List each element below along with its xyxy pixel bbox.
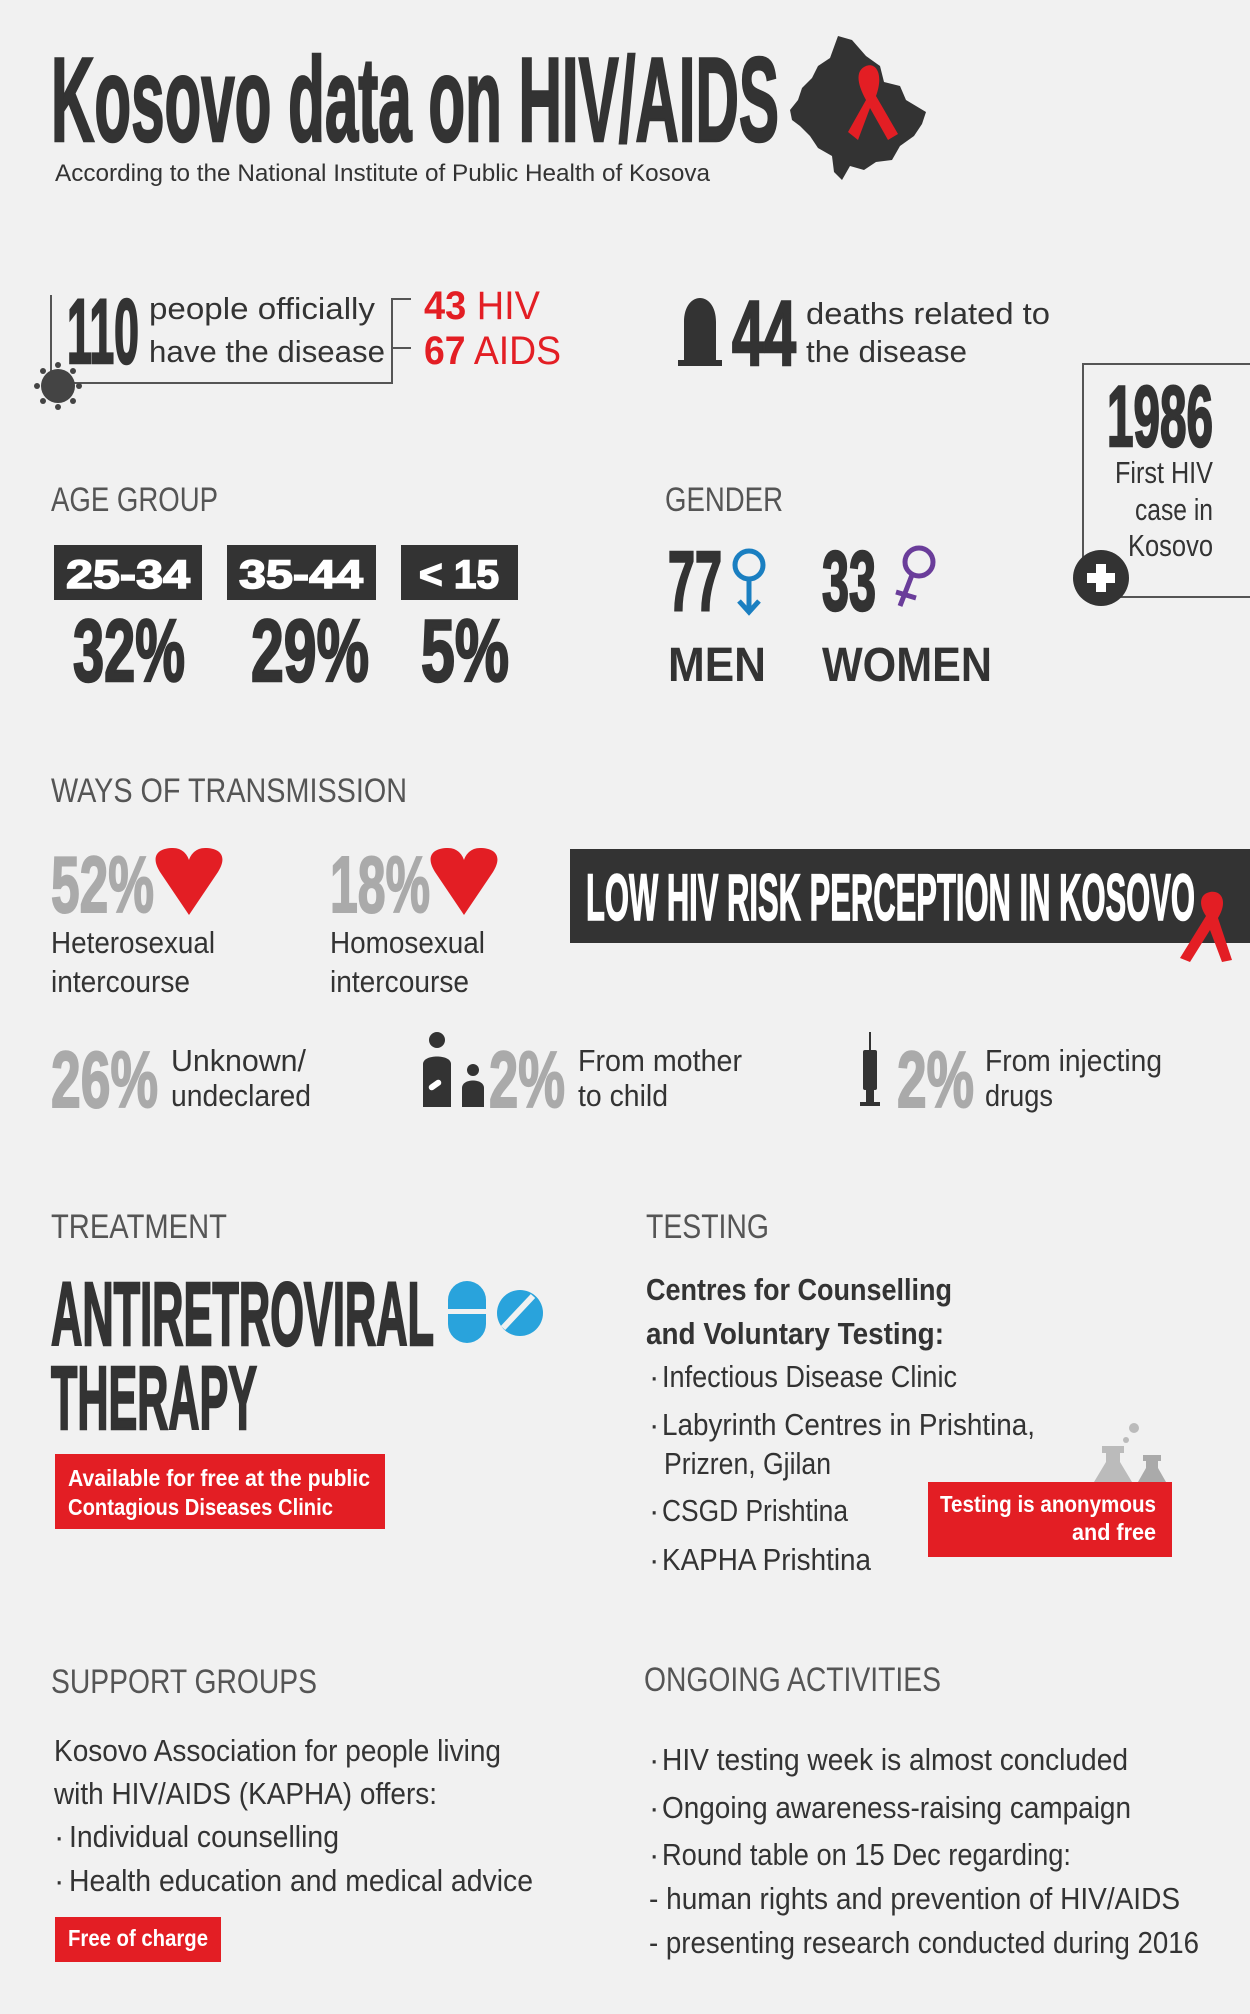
panel: gender: 33 (822, 534, 876, 628)
panel: age groups: 5% (421, 601, 509, 700)
panel: testing: Infectious Disease Clinic (662, 1359, 957, 1394)
callout: 1986 first case: case in (1135, 492, 1213, 527)
panel: ongoing activities: - presenting research conducted during 2016 (649, 1925, 1199, 1960)
callout: 1986 first case: First HIV (1115, 455, 1213, 490)
stat: homosexual: Homosexual (330, 925, 485, 960)
icon: pills (446, 1281, 543, 1343)
heading: ways of transmission: WAYS OF TRANSMISSION (51, 772, 407, 810)
stat: unknown: 26% (51, 1035, 158, 1124)
heading: gender: GENDER (665, 481, 783, 519)
stat: injecting drugs: From injecting (985, 1043, 1162, 1078)
panel: testing: CSGD Prishtina (662, 1493, 849, 1528)
stat: 44 deaths (678, 283, 1050, 385)
stat: unknown: undeclared (171, 1078, 311, 1113)
panel: testing (646, 1272, 1172, 1577)
icon: male (735, 551, 763, 612)
icon: flasks (1094, 1423, 1166, 1482)
panel: ongoing activities: Ongoing awareness-raising campaign (662, 1790, 1131, 1825)
stat: 110 people: people officially (149, 291, 376, 326)
panel: ongoing activities: HIV testing week is almost concluded (662, 1742, 1128, 1777)
panel: support groups: Health education and medical advice (69, 1863, 533, 1898)
icon: plus circle (1073, 550, 1129, 606)
panel: gender: WOMEN (822, 639, 992, 692)
panel: testing: · (649, 1493, 659, 1528)
panel: gender (668, 534, 992, 692)
stat: 44 deaths: the disease (806, 334, 967, 369)
stat: 110 people: 43 HIV (424, 284, 540, 328)
callout: free of charge (55, 1917, 221, 1962)
stat: homosexual: 18% (330, 840, 430, 929)
stat: injecting drugs: 2% (897, 1035, 974, 1124)
callout: 1986 first case: Kosovo (1128, 528, 1213, 563)
stat: mother to child: to child (578, 1078, 668, 1113)
panel: age groups (54, 545, 518, 700)
panel: support groups: · (54, 1819, 64, 1854)
heading: age group: AGE GROUP (51, 481, 218, 519)
stat: unknown: Unknown/ (171, 1043, 306, 1078)
panel: support groups: Individual counselling (69, 1819, 339, 1854)
panel: ongoing activities: · (649, 1790, 659, 1825)
panel: testing: and Voluntary Testing: (646, 1316, 944, 1351)
stat: 44 deaths: 44 (732, 283, 796, 385)
stat: homosexual (330, 840, 497, 999)
panel: age groups: 29% (251, 601, 369, 700)
panel: ongoing activities: Round table on 15 Dec regarding: (662, 1837, 1071, 1872)
icon: mother and child (423, 1032, 484, 1107)
callout: 1986 first case (1073, 364, 1250, 606)
icon: syringe (860, 1032, 880, 1106)
icon: ribbon (1180, 892, 1232, 962)
panel: ongoing activities: · (649, 1837, 659, 1872)
stat: mother to child: From mother (578, 1043, 742, 1078)
panel: ongoing activities: - human rights and prevention of HIV/AIDS (649, 1881, 1180, 1916)
callout: free treatment (55, 1454, 385, 1529)
callout: anonymous testing: Testing is anonymous (940, 1491, 1156, 1517)
callout: anonymous testing (928, 1482, 1172, 1557)
panel: treatment: THERAPY (51, 1349, 257, 1449)
stat: injecting drugs (860, 1032, 1162, 1124)
panel: support groups: Kosovo Association for people living (54, 1733, 501, 1768)
stat: 110 people: 110 (67, 281, 139, 383)
stat: unknown (51, 1035, 311, 1124)
heading: testing: TESTING (646, 1208, 769, 1246)
panel: support groups: · (54, 1863, 64, 1898)
stat: 110 people (34, 281, 561, 410)
callout: free treatment: Contagious Diseases Clinic (68, 1494, 333, 1520)
stat: heterosexual: Heterosexual (51, 925, 215, 960)
stat: 110 people: have the disease (149, 334, 385, 369)
callout: free treatment: Available for free at the public (68, 1465, 370, 1491)
stat: heterosexual: 52% (51, 840, 154, 929)
icon: Kosovo map with ribbon (790, 36, 926, 180)
subtitle: According to the National Institute of Public Health of Kosova (55, 160, 711, 187)
callout: anonymous testing: and free (1072, 1519, 1156, 1545)
panel: age groups: 32% (73, 601, 185, 700)
stat: 110 people: 67 AIDS (424, 329, 561, 373)
panel: support groups (53, 1733, 533, 1962)
panel: testing: · (649, 1542, 659, 1577)
icon: tombstone (678, 298, 722, 366)
panel: testing: · (649, 1359, 659, 1394)
icon: virus (34, 362, 82, 410)
panel: testing: Centres for Counselling (646, 1272, 952, 1307)
panel: ongoing activities (649, 1742, 1199, 1960)
panel: support groups: with HIV/AIDS (KAPHA) offers: (53, 1776, 437, 1811)
stat: injecting drugs: drugs (985, 1078, 1053, 1113)
panel: testing: Labyrinth Centres in Prishtina, (662, 1407, 1035, 1442)
icon: female (896, 548, 933, 606)
panel: gender: MEN (668, 639, 766, 692)
icon: heart (431, 848, 497, 915)
panel: age groups: < 15 (419, 553, 499, 597)
heading: support groups: SUPPORT GROUPS (51, 1663, 317, 1701)
heading: treatment: TREATMENT (51, 1208, 227, 1246)
icon: heart (156, 848, 222, 915)
panel: testing: KAPHA Prishtina (662, 1542, 872, 1577)
stat: mother to child (423, 1032, 742, 1124)
banner: low risk perception (570, 849, 1250, 962)
stat: mother to child: 2% (489, 1035, 565, 1124)
stat: heterosexual: intercourse (51, 964, 190, 999)
panel: gender: 77 (668, 534, 722, 628)
callout: free of charge: Free of charge (68, 1925, 208, 1951)
stat: homosexual: intercourse (330, 964, 469, 999)
panel: testing: Prizren, Gjilan (664, 1446, 831, 1481)
panel: ongoing activities: · (649, 1742, 659, 1777)
heading: ongoing activities: ONGOING ACTIVITIES (644, 1661, 941, 1699)
stat: 44 deaths: deaths related to (806, 296, 1050, 331)
panel: testing: · (649, 1407, 659, 1442)
panel: age groups: 25-34 (66, 553, 191, 597)
panel: treatment (51, 1265, 543, 1529)
panel: treatment: ANTIRETROVIRAL (51, 1265, 434, 1365)
stat: heterosexual (51, 840, 222, 999)
panel: age groups: 35-44 (239, 553, 364, 597)
